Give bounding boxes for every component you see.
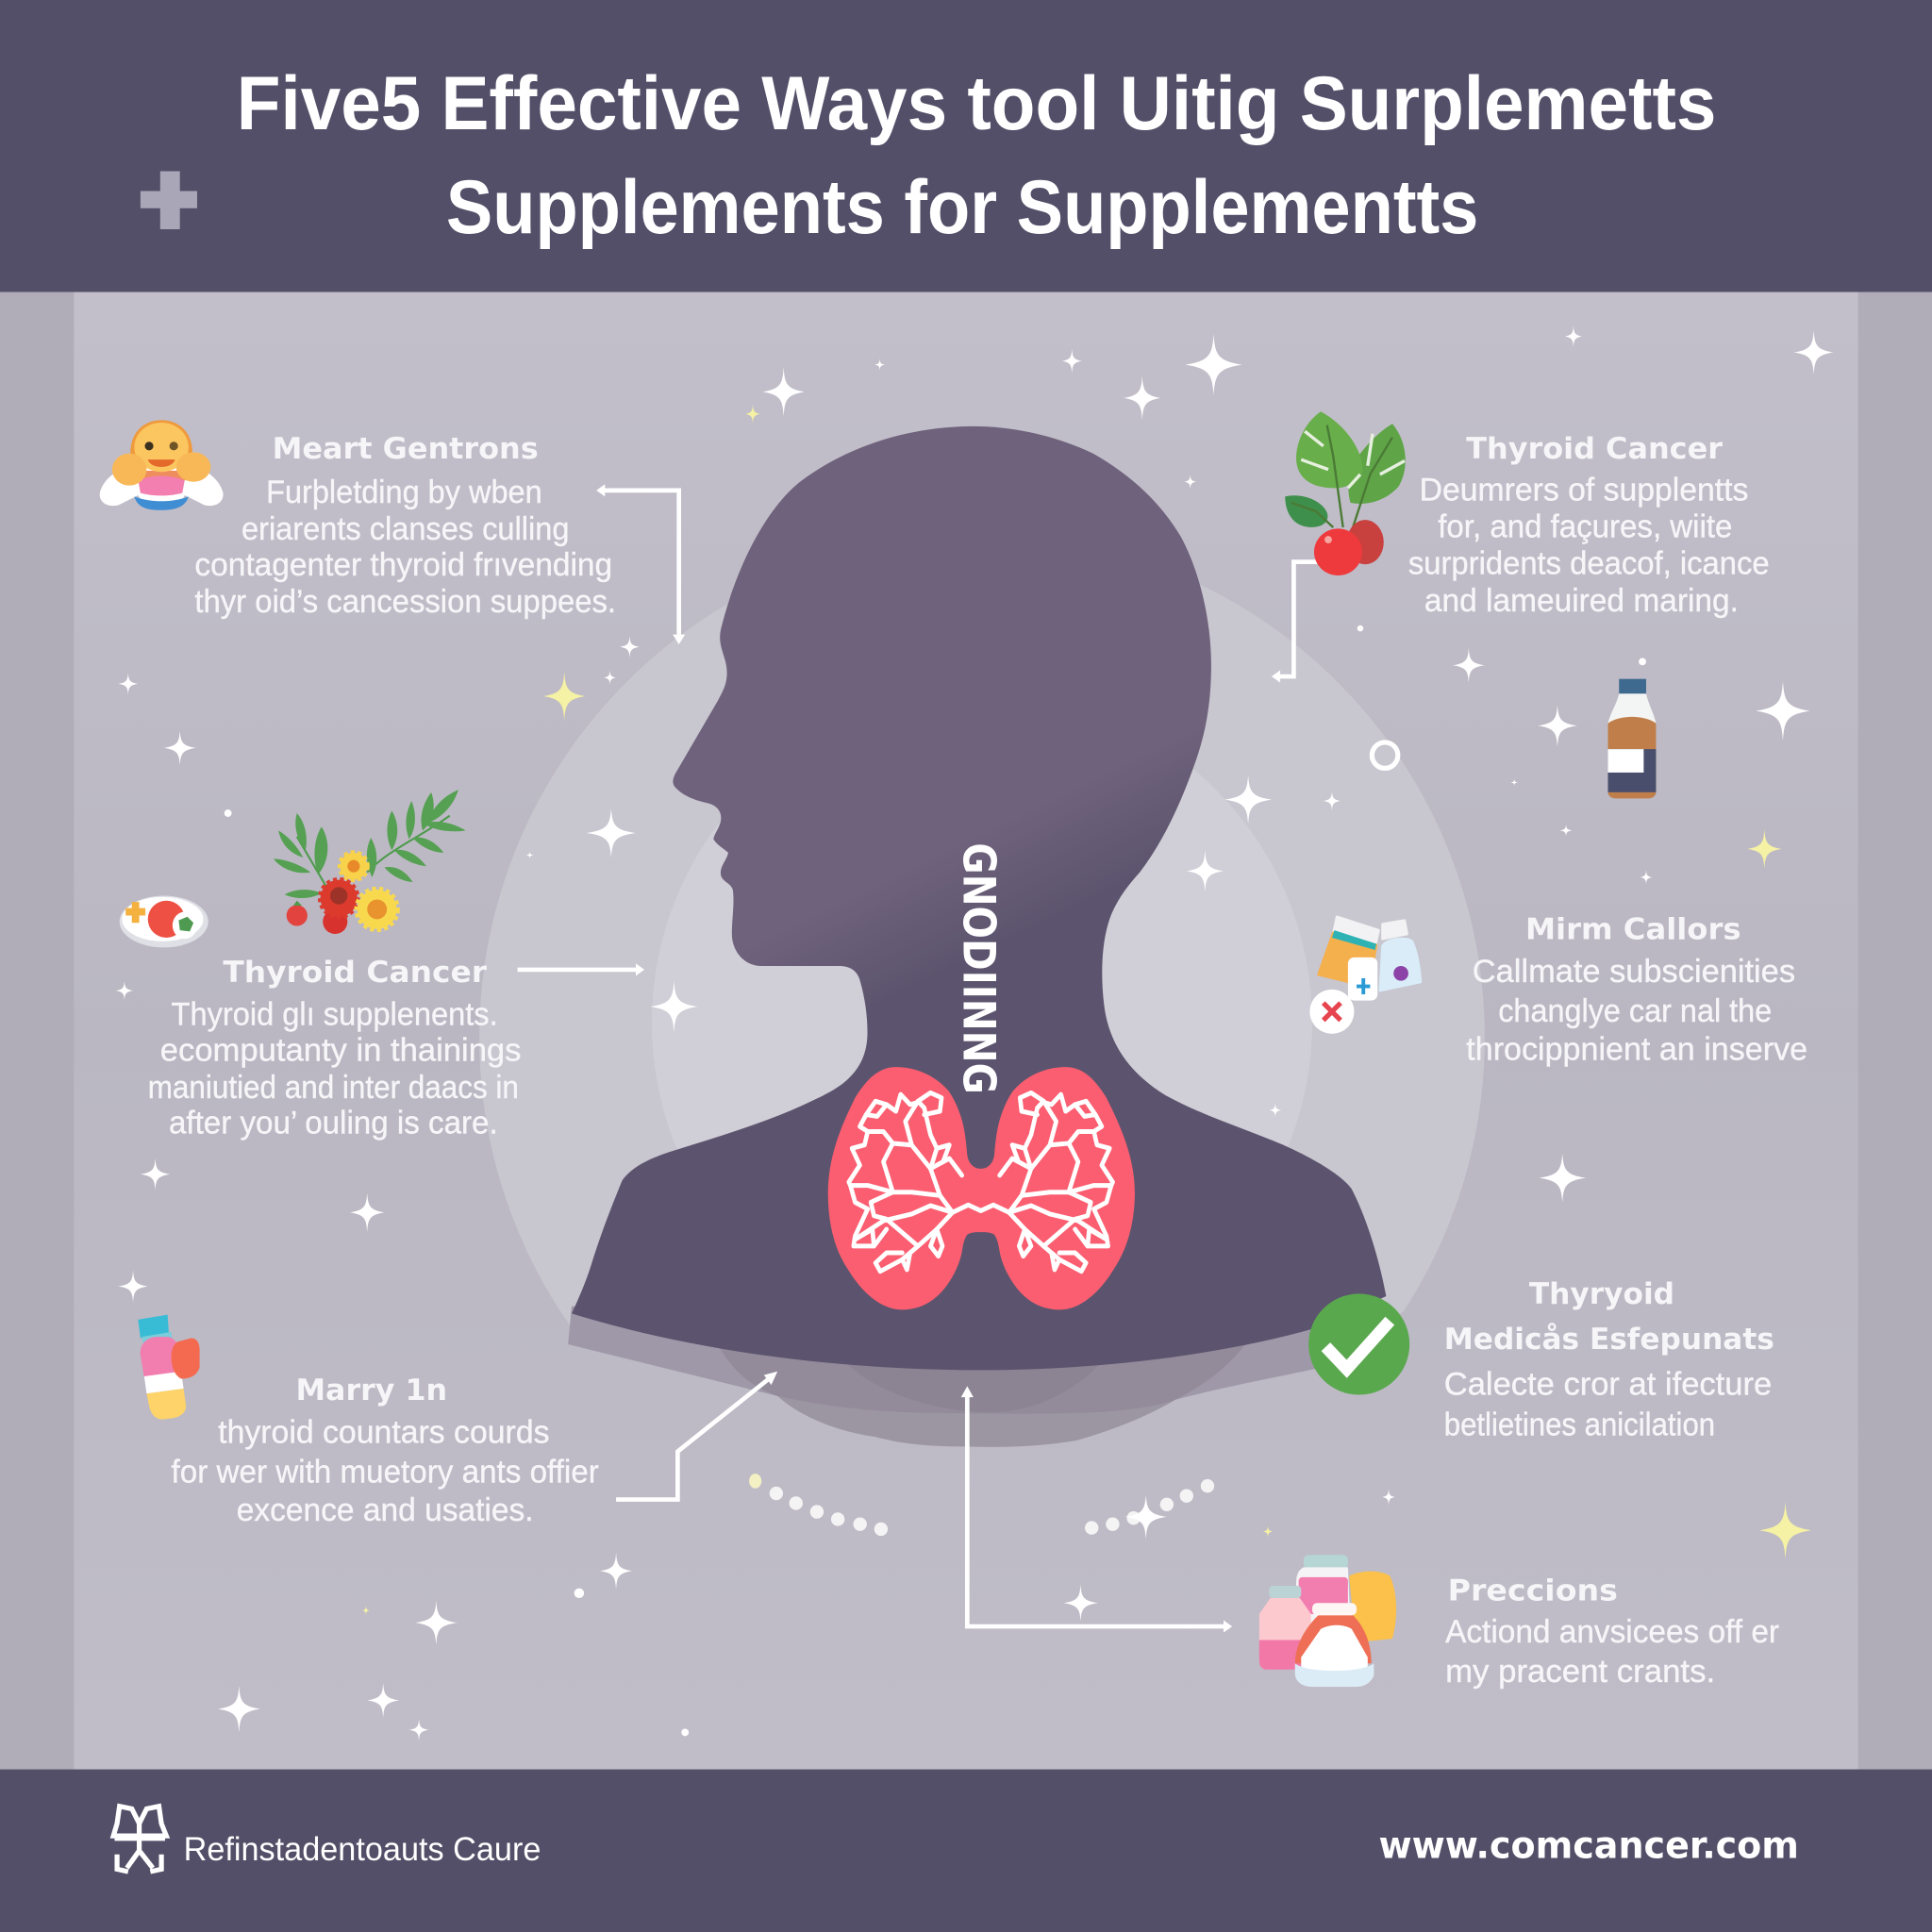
icon: leaves and apples: [1285, 411, 1406, 575]
text block: Meart Gentrons: Furþletding by wben: [266, 475, 542, 510]
icon: bottles group: [1259, 1555, 1396, 1687]
header band: [0, 0, 1932, 292]
text block: Thyryoid Medical: Calecte cror at ifecture: [1444, 1367, 1772, 1403]
thyroid gland illustration: [828, 1067, 1135, 1309]
icon: footer logo: [113, 1807, 166, 1872]
text block: Thyroid Cancer right: for, and façures, wiite: [1438, 508, 1732, 544]
icon: smiling person: [100, 420, 224, 510]
text block: Meart Gentrons: Meart Gentrons: [273, 432, 539, 466]
head and shoulders silhouette: [572, 426, 1386, 1370]
icon: plate with tomato: [120, 896, 208, 947]
gland lobes: [828, 1067, 1135, 1309]
text block: Marry 1n: for wer with muetory ants offier: [172, 1454, 599, 1490]
gland branches right: [981, 1092, 1113, 1272]
text block: Thyroid Cancer left: maniutied and inter daacs in: [148, 1070, 519, 1106]
text block: Meart Gentrons: contagenter thyroid frıvending: [194, 547, 612, 583]
gland branches left: [849, 1092, 981, 1272]
text block: Mirm Callors: Callmate subscienities: [1473, 954, 1795, 990]
text block: Mirm Callors: throcippnient an inserve: [1466, 1031, 1807, 1067]
text block: Preccions: Actiond anvsicees off er: [1445, 1614, 1779, 1650]
title: Five5 Effective Ways tool Uitig Surplemetts: [237, 61, 1716, 146]
text block: Marry 1n: [172, 1374, 599, 1528]
footer band: [0, 1770, 1932, 1932]
vertical neck label: GNODIINNG: [952, 842, 1004, 1094]
sparkles: [116, 325, 1834, 1741]
text block: Thyroid Cancer right: surpridents deacof, icance: [1408, 546, 1770, 582]
arrow: middle left: [518, 963, 644, 975]
text block: Mirm Callors: changlye car nal the: [1498, 993, 1772, 1029]
text block: Thyroid Cancer left: after you’ ouling is care.: [169, 1106, 498, 1141]
text block: Meart Gentrons: thyr oid’s cancession suppees.: [194, 584, 616, 620]
arrow: lower left: [616, 1372, 777, 1500]
title: [237, 61, 1716, 250]
text block: Thyroid Cancer right: [1408, 432, 1770, 619]
icon: header plus: [141, 172, 197, 229]
icon: supplement bottle: [1607, 679, 1656, 798]
text block: Mirm Callors: [1466, 912, 1807, 1067]
text block: Thyryoid Medical: Medicås Esfepunats: [1444, 1322, 1774, 1357]
footer organisation name: Refinstadentoauts Caure: [184, 1831, 541, 1868]
text block: Marry 1n: thyroid countars courds: [218, 1414, 550, 1450]
text block: Thyroid Cancer left: ecomputanty in thainings: [160, 1033, 521, 1069]
text block: Preccions: Preccions: [1448, 1574, 1618, 1608]
text block: Thyroid Cancer right: and lameuired maring.: [1424, 583, 1739, 619]
text block: Marry 1n: excence and usaties.: [237, 1492, 534, 1528]
arrow: top right: [1272, 562, 1317, 683]
title: Supplements for Supplementts: [446, 165, 1478, 250]
text block: Thyroid Cancer left: Thyroid Cancer: [223, 956, 487, 990]
icon: green check mark: [1308, 1293, 1409, 1395]
text block: Thyryoid Medical: [1444, 1277, 1774, 1443]
text block: Mirm Callors: Mirm Callors: [1525, 912, 1741, 946]
icon: flowers and leaves: [274, 790, 466, 934]
arrow: bottom centre: [961, 1386, 1232, 1633]
text block: Thyryoid Medical: betlietines anicilation: [1444, 1407, 1715, 1443]
footer website: www.comcancer.com: [1379, 1825, 1799, 1868]
text block: Thyroid Cancer left: [148, 956, 521, 1141]
text block: Marry 1n: Marry 1n: [295, 1374, 447, 1407]
text block: Thyroid Cancer right: Deumrers of supplentts: [1420, 472, 1748, 508]
text block: Meart Gentrons: [194, 432, 616, 620]
text block: Thyroid Cancer right: Thyroid Cancer: [1466, 432, 1724, 466]
shadow bands beneath shoulders: [568, 1306, 1315, 1447]
text block: Meart Gentrons: eriarents clanses culling: [242, 511, 569, 547]
arrow: top left: [596, 484, 685, 644]
text block: Thyroid Cancer left: Thyroid glı supplenents.: [172, 997, 498, 1033]
icon: pill bottle: [138, 1315, 200, 1420]
text block: Thyryoid Medical: Thyryoid: [1529, 1277, 1674, 1311]
icon: supplement jars: [1309, 917, 1421, 1034]
text block: Preccions: my pracent crants.: [1445, 1654, 1715, 1690]
text block: Preccions: [1445, 1574, 1779, 1690]
background circles behind silhouette: [479, 585, 1485, 1324]
